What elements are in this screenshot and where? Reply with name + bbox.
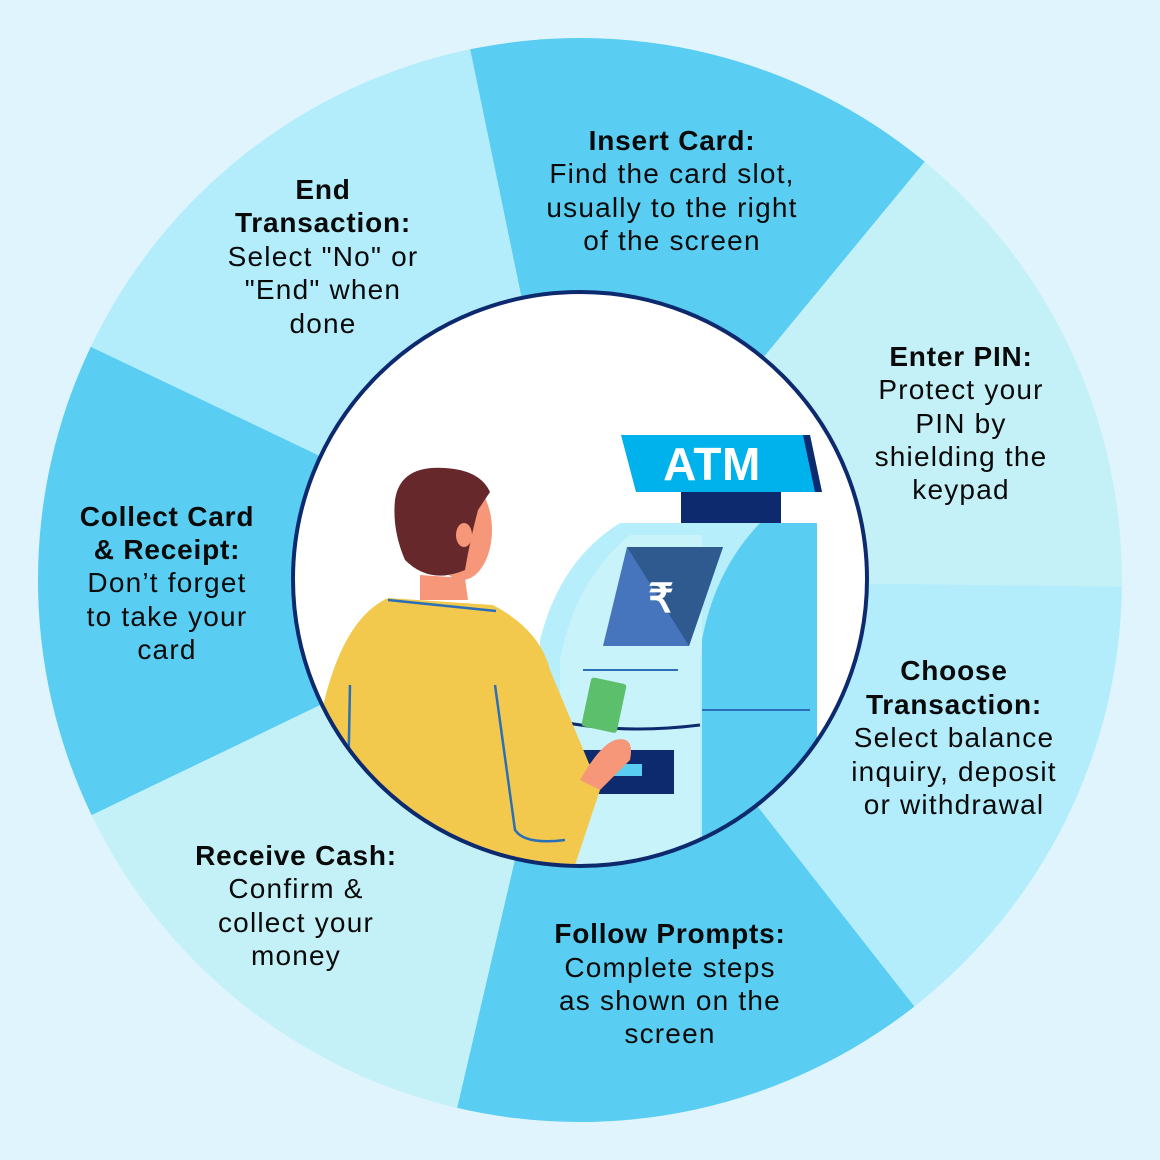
text: follow prompts: Follow Prompts: (554, 918, 786, 949)
text: end transaction: Transaction: (235, 207, 411, 238)
wedge: choose transaction (580, 580, 1122, 1006)
wedge: collect card (38, 347, 580, 815)
text: enter pin: Enter PIN: (889, 341, 1033, 372)
atm body (535, 523, 817, 873)
text: collect card: card (137, 634, 197, 665)
text: insert card (546, 125, 798, 256)
text: follow prompts: screen (624, 1018, 716, 1049)
text: enter pin: Protect your (878, 374, 1044, 405)
text: collect card: & Receipt: (94, 534, 240, 565)
text: end transaction: Select "No" or (228, 241, 418, 272)
person (320, 468, 631, 880)
wedge: insert card (470, 38, 925, 580)
text: collect card: Collect Card (80, 501, 254, 532)
icon: screen with rupee (603, 547, 723, 646)
wedge: enter pin (580, 162, 1122, 587)
text: follow prompts (554, 918, 786, 1049)
text: enter pin: keypad (912, 474, 1010, 505)
wedge: end transaction (91, 49, 580, 580)
text: insert card: Insert Card: (589, 125, 755, 156)
text: collect card (80, 501, 254, 665)
text: end transaction (228, 174, 418, 339)
text: choose transaction: Select balance (854, 722, 1054, 753)
text: collect card: to take your (87, 601, 247, 632)
atm sign (621, 435, 822, 523)
text: choose transaction (851, 655, 1057, 820)
icon: green card (581, 677, 627, 733)
illustration: person at ATM (293, 292, 867, 880)
text: receive cash: money (251, 940, 341, 971)
text: follow prompts: as shown on the (559, 985, 781, 1016)
text: end transaction: done (289, 308, 357, 339)
atm sign: ATM (663, 438, 761, 490)
icon: screen with rupee: ₹ (648, 577, 674, 621)
text: insert card: of the screen (583, 225, 761, 256)
text: enter pin: PIN by (915, 408, 1007, 439)
text: enter pin: shielding the (875, 441, 1047, 472)
wedge: receive cash (92, 580, 580, 1108)
wedge: follow prompts (457, 580, 914, 1122)
text: receive cash: Confirm & (228, 873, 364, 904)
text: choose transaction: inquiry, deposit (851, 756, 1057, 787)
text: receive cash (195, 840, 397, 971)
text: choose transaction: or withdrawal (864, 789, 1044, 820)
text: receive cash: collect your (218, 907, 374, 938)
text: end transaction: End (295, 174, 351, 205)
text: enter pin (875, 341, 1047, 505)
text: follow prompts: Complete steps (564, 952, 776, 983)
text: choose transaction: Transaction: (866, 689, 1042, 720)
text: end transaction: "End" when (245, 274, 401, 305)
text: collect card: Don’t forget (87, 567, 247, 598)
text: insert card: Find the card slot, (549, 158, 795, 189)
text: choose transaction: Choose (900, 655, 1008, 686)
text: insert card: usually to the right (546, 192, 798, 223)
text: receive cash: Receive Cash: (195, 840, 397, 871)
